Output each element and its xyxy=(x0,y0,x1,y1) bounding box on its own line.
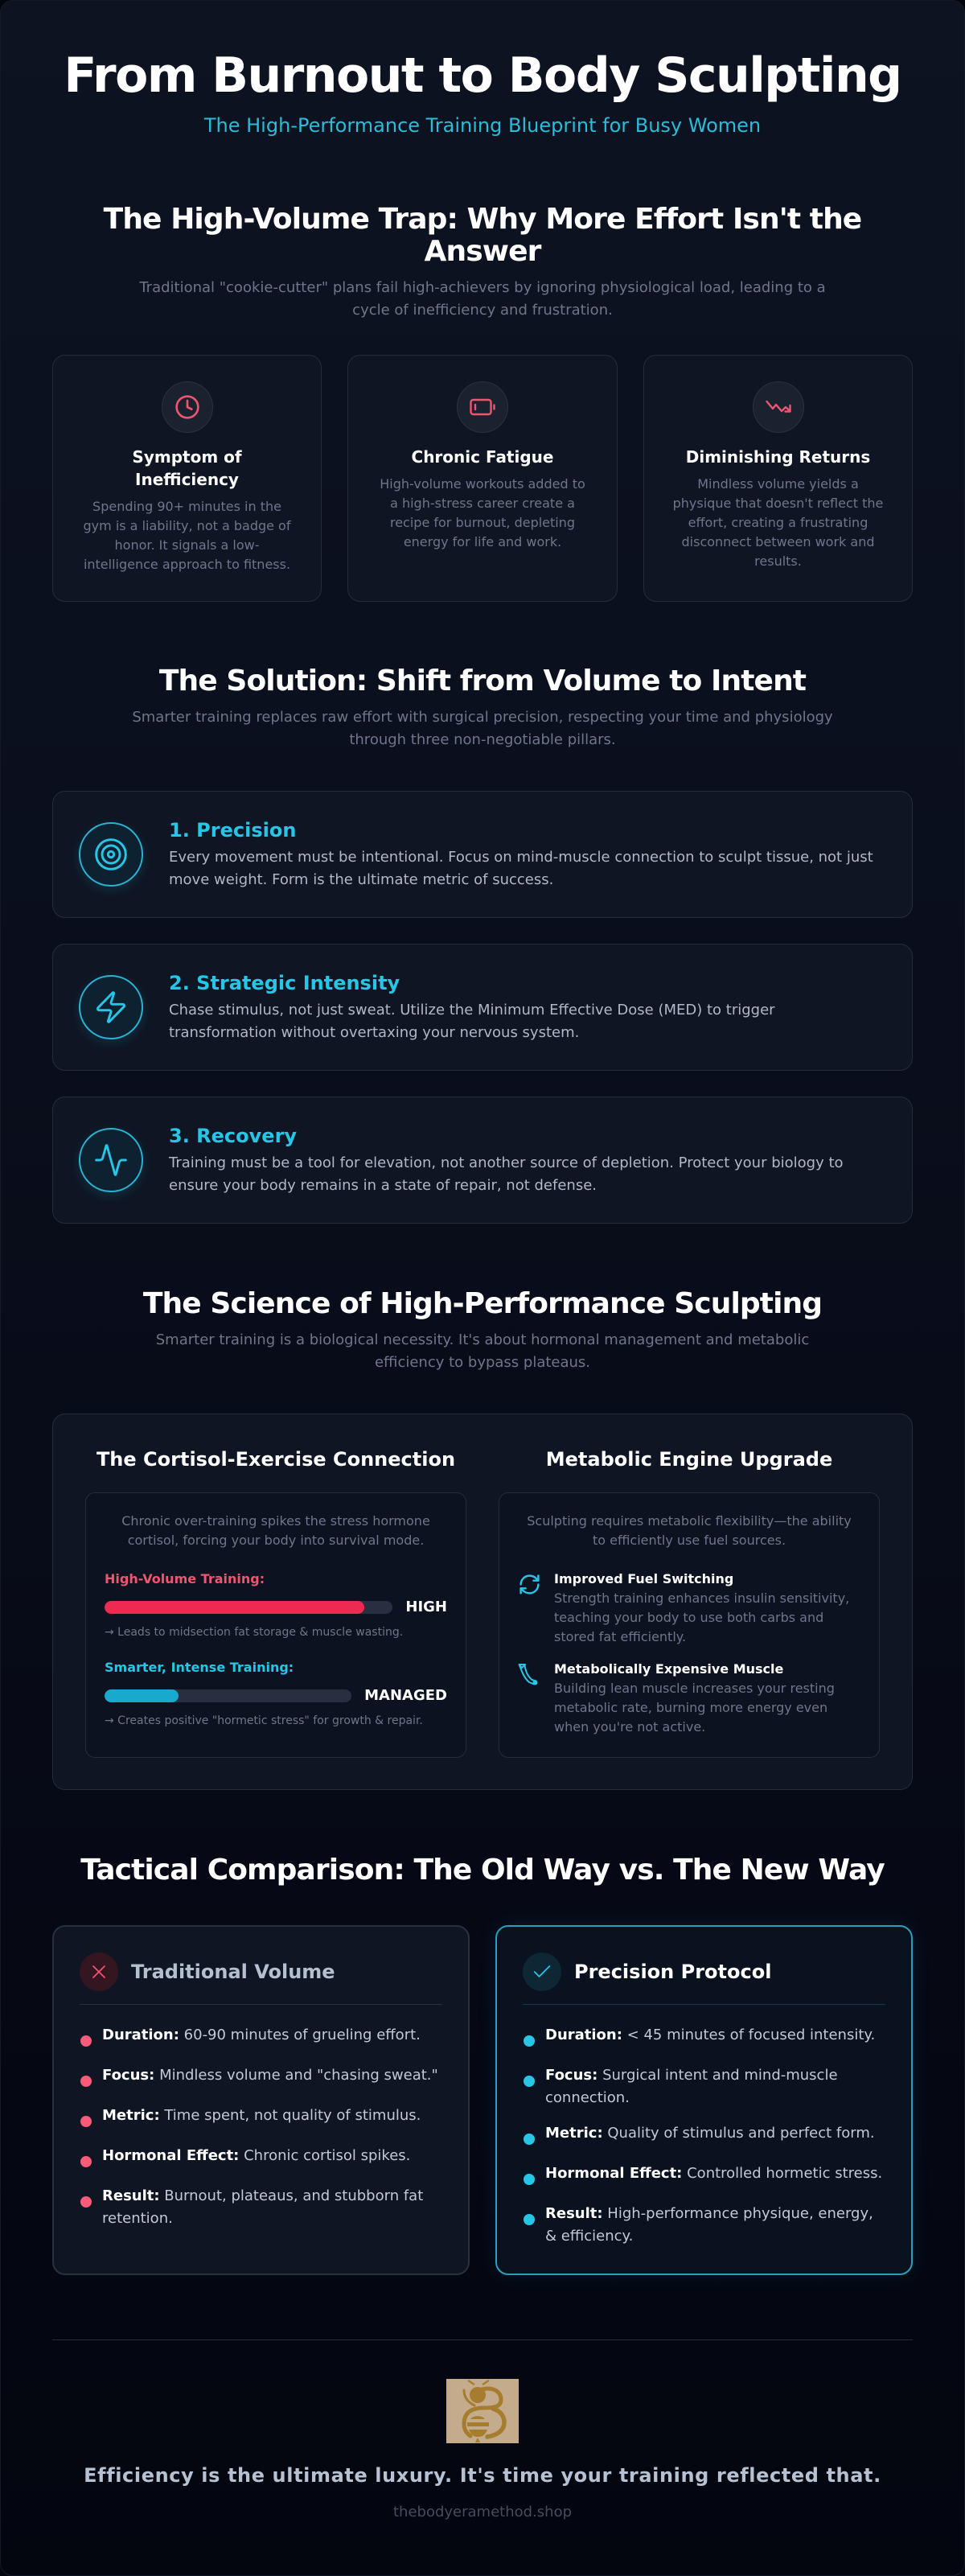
panel heading: Precision Protocol xyxy=(574,1961,771,1983)
card text: High-volume workouts added to xyxy=(380,476,585,492)
bar chart: high cortisol xyxy=(105,1599,447,1615)
pillar heading: 2. Strategic Intensity xyxy=(169,972,400,994)
list item: duration: Duration: 60-90 minutes of grueling effort. xyxy=(102,2027,421,2043)
fuel switching text: stored fat efficiently. xyxy=(554,1629,686,1644)
title: From Burnout to Body Sculpting xyxy=(64,47,901,104)
list item: result xyxy=(524,2205,873,2245)
heading: the high-volume trap: The High-Volume Trap: Why More Effort Isn't the xyxy=(104,203,861,236)
card text: physique that doesn't reflect the xyxy=(673,496,883,511)
card text: disconnect between work and xyxy=(682,534,874,549)
icon: clock xyxy=(161,381,212,433)
panel: traditional volume xyxy=(52,1925,470,2275)
pillar text xyxy=(169,972,775,1041)
panel header xyxy=(523,1953,771,1991)
list item: hormonal effect: Hormonal Effect: Controlled hormetic stress. xyxy=(545,2165,882,2182)
pillar description xyxy=(169,1154,844,1194)
pillar description: Training must be a tool for elevation, not another source of depletion. Protect your biology to xyxy=(169,1154,844,1171)
heading: metabolic column: Metabolic Engine Upgrade xyxy=(546,1448,832,1471)
icon: declining trend xyxy=(753,381,804,433)
note: high-volume outcome: → Leads to midsection fat storage & muscle wasting. xyxy=(105,1626,403,1639)
muscle text: metabolic rate, burning more energy even xyxy=(554,1700,827,1715)
item: metabolically expensive muscle xyxy=(518,1661,835,1734)
icon: pulse xyxy=(79,1128,143,1192)
intro text: the science: Smarter training is a biological necessity. It's about hormonal management and metabolic xyxy=(156,1331,809,1348)
muscle text: Building lean muscle increases your resting xyxy=(554,1681,835,1696)
fuel switching text: Strength training enhances insulin sensitivity, xyxy=(554,1590,849,1606)
list item: result: Result: High-performance physique, energy, xyxy=(545,2205,873,2222)
fuel switching text: Improved Fuel Switching xyxy=(554,1571,733,1586)
card text: recipe for burnout, depleting xyxy=(390,515,575,530)
muscle text: when you're not active. xyxy=(554,1719,705,1734)
list item: result: & efficiency. xyxy=(545,2228,633,2245)
icon: lightning bolt xyxy=(79,975,143,1039)
list item: duration: Duration: < 45 minutes of focused intensity. xyxy=(545,2027,875,2043)
card heading: Chronic Fatigue xyxy=(412,447,553,467)
pillar description: Every movement must be intentional. Focus on mind-muscle connection to sculpt tissue, not just xyxy=(169,849,873,866)
bar track: managed xyxy=(105,1689,351,1702)
pillar description xyxy=(169,1002,775,1041)
list item: hormonal effect: Hormonal Effect: Chronic cortisol spikes. xyxy=(102,2147,410,2164)
metabolic intro text: Sculpting requires metabolic flexibility—the ability xyxy=(527,1513,852,1529)
bar chart: managed cortisol xyxy=(105,1687,447,1704)
bar value: managed: MANAGED xyxy=(364,1687,447,1704)
fuel switching text: teaching your body to use both carbs and xyxy=(554,1610,823,1625)
card text: a high-stress career create a xyxy=(390,496,575,511)
list item: result: Result: Burnout, plateaus, and stubborn fat xyxy=(102,2187,423,2204)
intro text: high-volume trap: Traditional "cookie-cutter" plans fail high-achievers by ignoring physiological load, leading to a xyxy=(139,279,826,296)
intro text: high-volume trap: cycle of inefficiency and frustration. xyxy=(352,302,613,319)
panel: metabolic benefits xyxy=(499,1492,880,1758)
icon: refresh xyxy=(519,1574,540,1595)
card text xyxy=(380,476,585,549)
heading: the high-volume trap: Answer xyxy=(425,235,540,268)
intro text: high-volume trap xyxy=(139,279,826,319)
pillar heading: 1. Precision xyxy=(169,819,296,842)
card text: Mindless volume yields a xyxy=(697,476,859,492)
icon: cross xyxy=(80,1953,118,1991)
card text: honor. It signals a low- xyxy=(115,537,259,553)
panel header xyxy=(80,1953,335,1991)
intro text: the solution xyxy=(132,709,833,748)
pillar text xyxy=(169,1125,844,1194)
card heading: Diminishing Returns xyxy=(686,447,870,467)
label: high-volume training: High-Volume Training: xyxy=(105,1571,265,1586)
card text: intelligence approach to fitness. xyxy=(84,557,290,572)
card text xyxy=(673,476,883,569)
icon: muscle arm xyxy=(518,1664,537,1685)
panel: precision pillar xyxy=(52,791,913,918)
metabolic intro text xyxy=(527,1513,852,1548)
panel: cortisol comparison xyxy=(85,1492,466,1758)
cortisol intro text: Chronic over-training spikes the stress hormone xyxy=(121,1513,430,1529)
bar value: high: HIGH xyxy=(405,1599,447,1615)
card heading xyxy=(132,447,242,489)
panel: symptom of inefficiency xyxy=(52,355,322,602)
heading: the science: The Science of High-Performance Sculpting xyxy=(143,1287,822,1320)
list item: focus: connection. xyxy=(545,2089,630,2106)
pillar description: transformation without overtaxing your nervous system. xyxy=(169,1024,579,1041)
heading: tactical comparison: Tactical Comparison: The Old Way vs. The New Way xyxy=(80,1854,885,1887)
list item: result xyxy=(80,2187,423,2227)
pillar description: ensure your body remains in a state of repair, not defense. xyxy=(169,1177,597,1194)
pillar description: move weight. Form is the ultimate metric of success. xyxy=(169,871,553,888)
pillar description: Chase stimulus, not just sweat. Utilize the Minimum Effective Dose (MED) to trigger xyxy=(169,1002,775,1018)
list item: focus: Focus: Surgical intent and mind-muscle xyxy=(545,2067,838,2084)
list item: metric: Metric: Quality of stimulus and perfect form. xyxy=(545,2125,875,2142)
card heading: Symptom of xyxy=(132,447,242,467)
bar track: high xyxy=(105,1601,392,1614)
heading: the high-volume trap xyxy=(103,203,861,268)
subtitle: The High-Performance Training Blueprint for Busy Women xyxy=(204,114,761,137)
fuel switching text xyxy=(554,1571,849,1644)
card text xyxy=(84,499,291,572)
panel: recovery pillar xyxy=(52,1097,913,1224)
panel: chronic fatigue xyxy=(347,355,618,602)
intro text: the science: efficiency to bypass plateaus. xyxy=(375,1354,590,1371)
panel: precision protocol xyxy=(495,1925,913,2275)
card text: Spending 90+ minutes in the xyxy=(92,499,281,514)
panel: science xyxy=(52,1414,913,1790)
muscle text xyxy=(554,1661,835,1734)
list item: result: retention. xyxy=(102,2210,173,2227)
panel: diminishing returns xyxy=(643,355,913,602)
list item: metric: Metric: Time spent, not quality of stimulus. xyxy=(102,2107,421,2124)
metabolic intro text: to efficiently use fuel sources. xyxy=(593,1533,786,1548)
cortisol intro text xyxy=(121,1513,430,1548)
panel heading: Traditional Volume xyxy=(131,1961,335,1983)
list item: focus: Focus: Mindless volume and "chasing sweat." xyxy=(102,2067,438,2084)
intro text: the solution: through three non-negotiable pillars. xyxy=(349,731,616,748)
heading: cortisol column: The Cortisol-Exercise Connection xyxy=(96,1448,455,1471)
label: smarter training: Smarter, Intense Training: xyxy=(105,1660,294,1675)
muscle text: Metabolically Expensive Muscle xyxy=(554,1661,783,1677)
list item: focus xyxy=(524,2067,838,2106)
intro text: the science xyxy=(156,1331,809,1371)
icon: low battery xyxy=(457,381,508,433)
heading: the solution: The Solution: Shift from Volume to Intent xyxy=(159,665,806,697)
icon: check xyxy=(523,1953,561,1991)
intro text: the solution: Smarter training replaces raw effort with surgical precision, respecting your time and physiology xyxy=(132,709,833,726)
cortisol intro text: cortisol, forcing your body into survival mode. xyxy=(128,1533,424,1548)
card heading: Inefficiency xyxy=(135,470,239,489)
note: smarter training outcome: → Creates positive "hormetic stress" for growth & repair. xyxy=(105,1714,423,1727)
pillar text xyxy=(169,819,873,888)
pillar heading: 3. Recovery xyxy=(169,1125,297,1147)
card text: gym is a liability, not a badge of xyxy=(84,518,290,533)
card text: results. xyxy=(754,553,802,569)
pillar description xyxy=(169,849,873,888)
card text: energy for life and work. xyxy=(404,534,561,549)
closing tagline: Efficiency is the ultimate luxury. It's time your training reflected that. xyxy=(84,2464,881,2487)
card text: effort, creating a frustrating xyxy=(688,515,868,530)
website address: thebodyeramethod.shop xyxy=(393,2504,572,2520)
logo: bee emblem xyxy=(446,2379,519,2443)
panel: strategic intensity pillar xyxy=(52,944,913,1071)
item: improved fuel switching xyxy=(519,1571,849,1644)
icon: target xyxy=(79,822,143,887)
